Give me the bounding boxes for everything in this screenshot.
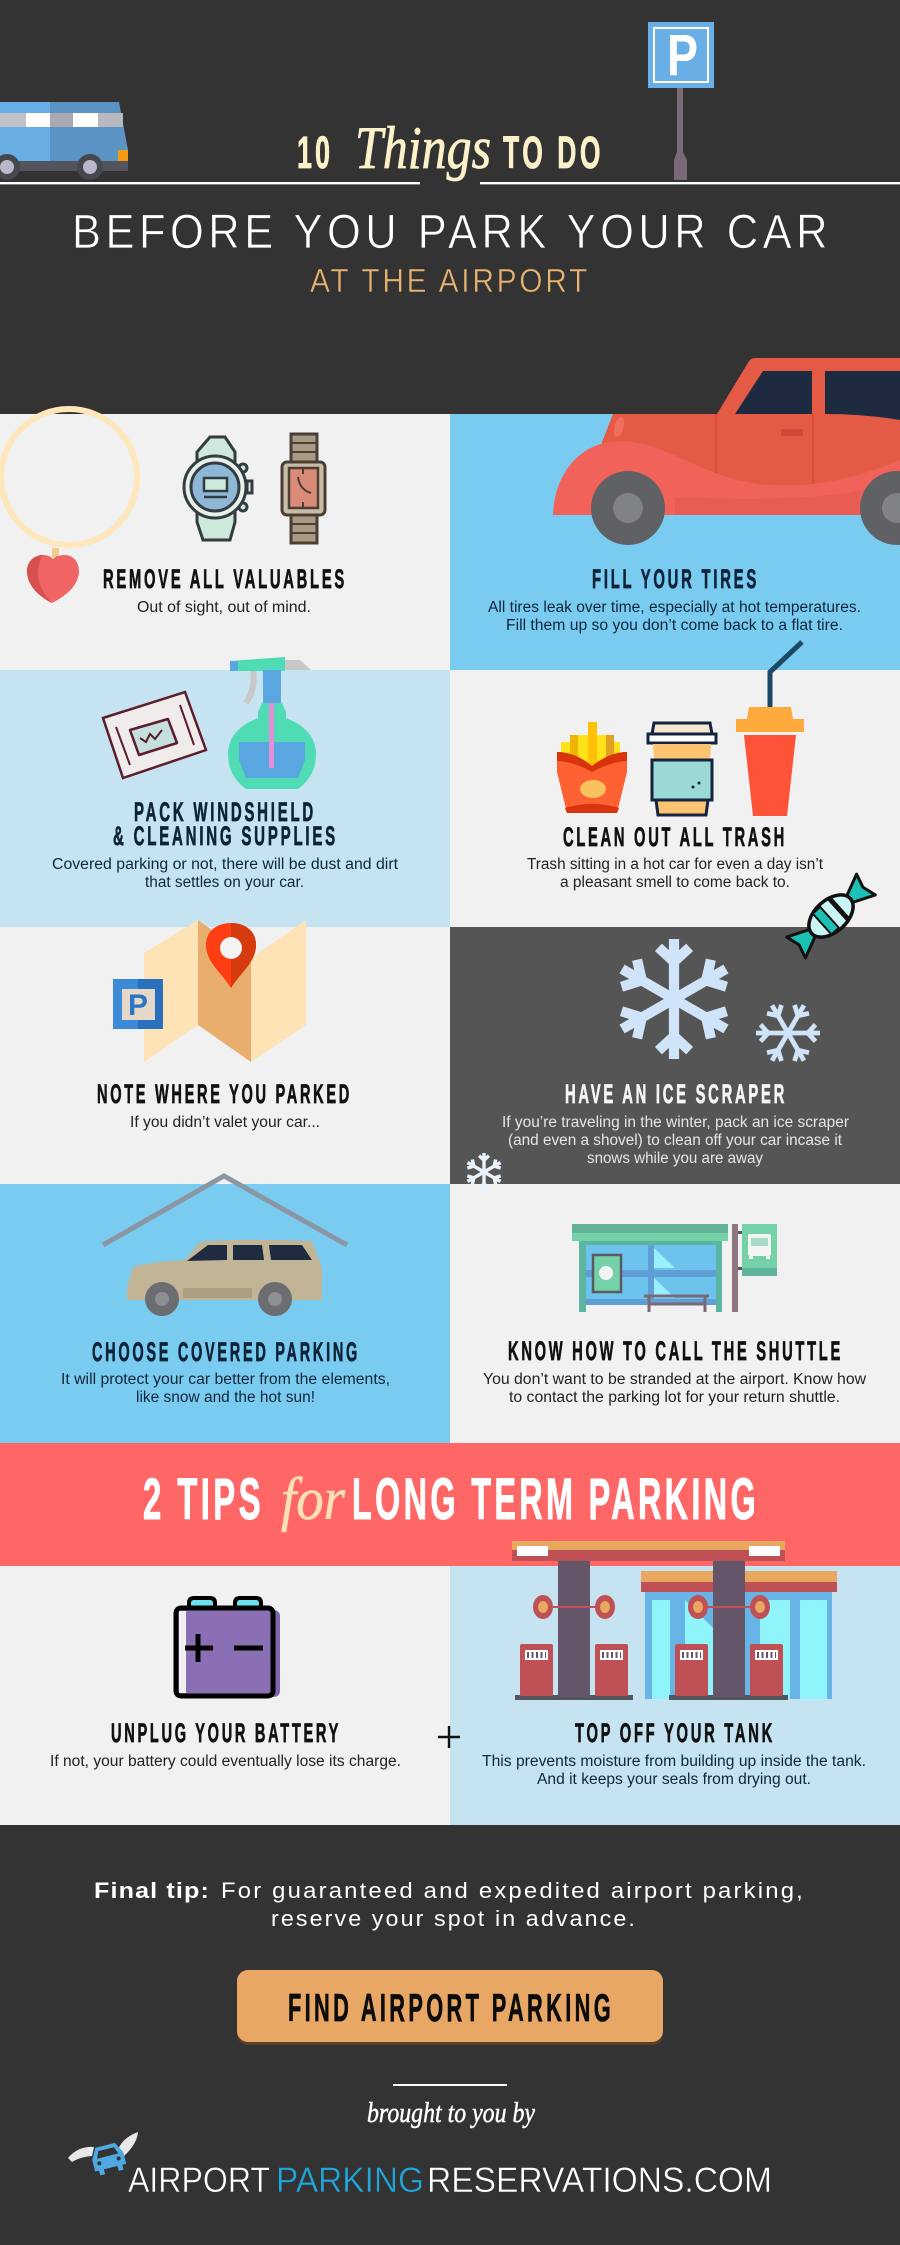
panel: remove all valuables bbox=[0, 409, 450, 670]
button: find airport parking bbox=[237, 1970, 663, 2045]
icon: cleaning wipes bbox=[103, 692, 206, 778]
icon: carport roof bbox=[103, 1176, 347, 1245]
title: 10 Things to do: Things bbox=[355, 115, 491, 181]
icon: square watch bbox=[282, 434, 325, 543]
heading: NOTE WHERE YOU PARKED bbox=[97, 1079, 352, 1109]
icon: large snowflake bbox=[614, 939, 734, 1059]
icon: plus sign bbox=[438, 1726, 460, 1748]
description: This prevents moisture from building up inside the tank. bbox=[482, 1753, 866, 1770]
description: If not, your battery could eventually lose its charge. bbox=[50, 1753, 401, 1770]
logo text bbox=[128, 2161, 772, 2200]
panel: clean out all trash bbox=[450, 642, 900, 927]
icon: small snowflake bbox=[744, 989, 832, 1077]
icon: tiny snowflake bbox=[465, 1153, 503, 1191]
description: a pleasant smell to come back to. bbox=[560, 874, 790, 891]
icon: coffee cup bbox=[648, 723, 716, 815]
description bbox=[61, 1371, 390, 1406]
final tip text: reserve your spot in advance. bbox=[271, 1906, 637, 1931]
icon: red car bbox=[553, 358, 900, 545]
title: 10 Things to do: 10 bbox=[297, 127, 333, 178]
heading: UNPLUG YOUR BATTERY bbox=[111, 1718, 341, 1748]
icon: shuttle stop bbox=[572, 1224, 777, 1312]
panel: fill your tires bbox=[450, 358, 900, 670]
icon: parking square: P bbox=[128, 989, 148, 1022]
icon: necklace with heart bbox=[1, 409, 137, 603]
icon: spray bottle bbox=[228, 657, 316, 789]
description bbox=[488, 599, 861, 634]
panel: unplug your battery bbox=[0, 1566, 450, 1825]
icon: soda cup bbox=[736, 642, 804, 816]
title: 10 Things to do: TO DO bbox=[503, 127, 604, 178]
panel: choose covered parking bbox=[0, 1176, 450, 1443]
icon: gas station bbox=[512, 1541, 837, 1700]
final tip text: Final tip: bbox=[94, 1878, 210, 1903]
description bbox=[482, 1753, 866, 1788]
description: that settles on your car. bbox=[145, 874, 304, 891]
icon: parking square bbox=[113, 979, 163, 1029]
description bbox=[52, 856, 399, 891]
description: (and even a shovel) to clean off your car incase it bbox=[508, 1132, 843, 1149]
panel: top off your tank bbox=[450, 1541, 900, 1825]
brought to you by: brought to you by bbox=[367, 2097, 535, 2129]
description: snows while you are away bbox=[587, 1150, 763, 1167]
panel: have an ice scraper bbox=[450, 873, 900, 1184]
heading: FILL YOUR TIRES bbox=[592, 564, 759, 594]
description: Out of sight, out of mind. bbox=[137, 599, 311, 616]
banner: 2 tips for long term parking: for bbox=[281, 1466, 346, 1532]
icon: battery bbox=[176, 1598, 280, 1697]
description bbox=[527, 856, 824, 891]
icon: map with pin bbox=[144, 920, 306, 1062]
description: like snow and the hot sun! bbox=[136, 1389, 315, 1406]
description: to contact the parking lot for your return shuttle. bbox=[509, 1389, 840, 1406]
heading: PACK WINDSHIELD bbox=[134, 797, 316, 827]
icon: parking sign: P bbox=[667, 23, 698, 88]
description: You don’t want to be stranded at the airport. Know how bbox=[483, 1371, 867, 1388]
description: Covered parking or not, there will be dust and dirt bbox=[52, 856, 399, 873]
description: It will protect your car better from the elements, bbox=[61, 1371, 390, 1388]
panel: note where you parked bbox=[0, 920, 450, 1184]
icon: tan car bbox=[127, 1240, 322, 1316]
button: find airport parking: FIND AIRPORT PARKING bbox=[288, 1987, 614, 2030]
description: And it keeps your seals from drying out. bbox=[537, 1771, 811, 1788]
icon: french fries bbox=[557, 722, 627, 813]
logo text: AIRPORT bbox=[128, 2161, 270, 2200]
description: Fill them up so you don’t come back to a flat tire. bbox=[506, 617, 843, 634]
icon: parking sign bbox=[648, 22, 714, 180]
description: Trash sitting in a hot car for even a day isn’t bbox=[527, 856, 824, 873]
road line bbox=[0, 182, 900, 184]
logo text: RESERVATIONS.COM bbox=[427, 2161, 772, 2200]
logo text: PARKING bbox=[276, 2161, 424, 2200]
footer panel bbox=[0, 1825, 900, 2245]
banner: 2 tips for long term parking: 2 TIPS bbox=[143, 1467, 264, 1532]
final tip text: For guaranteed and expedited airport parking, bbox=[221, 1878, 805, 1903]
logo icon: winged car bbox=[68, 2132, 138, 2176]
heading: & CLEANING SUPPLIES bbox=[113, 821, 338, 851]
final tip text bbox=[94, 1878, 805, 1931]
divider bbox=[393, 2084, 507, 2086]
description: All tires leak over time, especially at hot temperatures. bbox=[488, 599, 861, 616]
subtitle: at the airport: AT THE AIRPORT bbox=[310, 262, 590, 299]
description: If you didn’t valet your car... bbox=[130, 1114, 320, 1131]
title: 10 Things to do bbox=[297, 115, 604, 181]
description bbox=[502, 1114, 849, 1167]
description bbox=[483, 1371, 867, 1406]
icon: blue bus bbox=[0, 102, 128, 180]
heading: CHOOSE COVERED PARKING bbox=[92, 1337, 360, 1367]
icon: candy bbox=[785, 873, 877, 959]
panel: know how to call the shuttle bbox=[450, 1184, 900, 1443]
header panel bbox=[0, 0, 900, 414]
description: If you’re traveling in the winter, pack an ice scraper bbox=[502, 1114, 849, 1131]
icon: round watch bbox=[184, 437, 252, 540]
banner: 2 tips for long term parking bbox=[0, 1443, 900, 1566]
heading bbox=[113, 797, 338, 851]
panel: pack windshield and cleaning supplies bbox=[0, 657, 450, 927]
heading: REMOVE ALL VALUABLES bbox=[103, 564, 347, 594]
title: before you park your car: BEFORE YOU PARK YOUR CAR bbox=[72, 206, 832, 259]
